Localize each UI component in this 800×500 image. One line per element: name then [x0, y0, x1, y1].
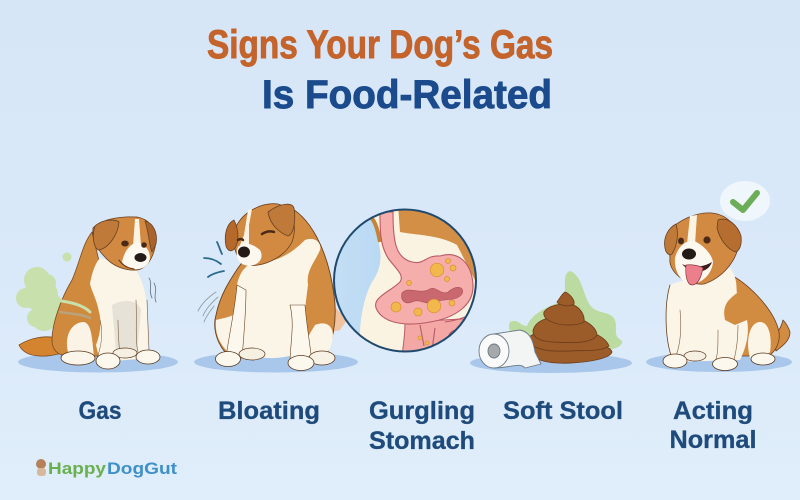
panel: bloating dog — [194, 204, 358, 372]
icon: tongue — [686, 265, 703, 285]
title: Signs Your Dog’s Gas — [207, 23, 553, 67]
label: Gurgling Stomach: Gurgling — [369, 397, 475, 425]
label: Acting Normal — [670, 397, 756, 454]
icon: motion marks — [198, 242, 224, 322]
icon: poop pile — [528, 292, 612, 363]
logo: DogGut — [107, 459, 177, 478]
label: Acting Normal: Normal — [670, 426, 756, 454]
logo — [36, 459, 177, 478]
icon: stink cloud — [509, 271, 622, 349]
icon: head — [225, 204, 295, 266]
label: Acting Normal: Acting — [673, 397, 753, 425]
label: Gurgling Stomach — [369, 397, 475, 455]
icon: logo dog — [36, 459, 46, 476]
logo: Happy — [48, 459, 107, 478]
title — [207, 23, 553, 117]
icon: head — [665, 213, 741, 285]
icon: toilet roll — [479, 330, 541, 368]
icon: gas cloud — [16, 252, 72, 331]
panel: gas dog — [16, 217, 178, 372]
label: Soft Stool: Soft Stool — [503, 397, 623, 425]
panel: soft stool — [470, 271, 632, 373]
label: Bloating: Bloating — [218, 397, 320, 425]
label: Gurgling Stomach: Stomach — [369, 427, 475, 455]
title: Is Food-Related — [262, 73, 552, 117]
label: Gas: Gas — [78, 397, 122, 425]
icon: head — [93, 217, 156, 270]
icon: check badge — [720, 181, 770, 221]
panel: acting normal dog — [646, 181, 792, 372]
panel: gurgling stomach — [334, 205, 480, 360]
